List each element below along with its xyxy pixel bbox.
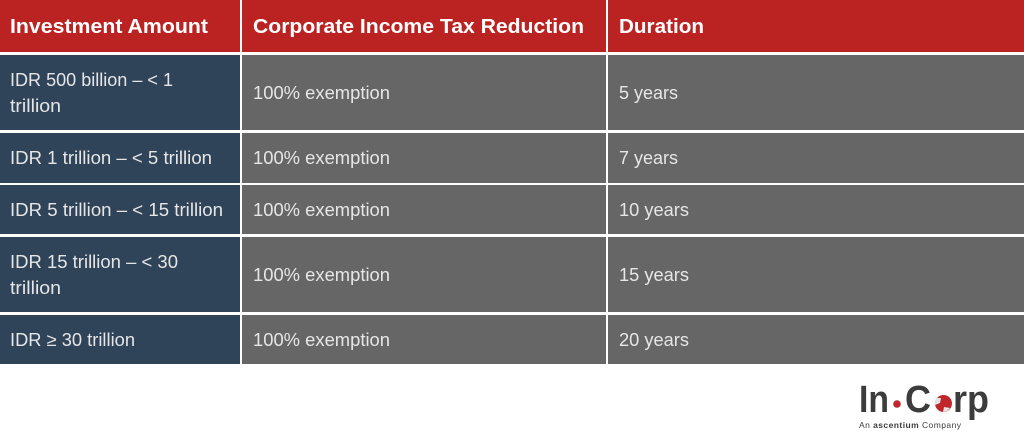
logo tagline: An ascentium Company bbox=[859, 420, 962, 430]
table header row bbox=[0, 0, 1024, 52]
tax reduction cell: 100% exemption bbox=[253, 83, 390, 103]
investment amount cell: trillion bbox=[10, 278, 61, 298]
header: investment amount bbox=[0, 0, 240, 52]
duration cell bbox=[608, 315, 1024, 364]
tax reduction cell bbox=[242, 133, 606, 183]
tax reduction cell: 100% exemption bbox=[253, 200, 390, 220]
header: corporate income tax reduction bbox=[242, 0, 606, 52]
duration cell bbox=[608, 237, 1024, 312]
duration cell: 15 years bbox=[619, 265, 689, 285]
investment amount cell: IDR 500 billion – < 1 bbox=[10, 70, 173, 90]
duration cell: 10 years bbox=[619, 200, 689, 220]
investment amount cell bbox=[0, 133, 240, 183]
row 4 bbox=[0, 237, 1024, 312]
investment amount cell: IDR 1 trillion – < 5 trillion bbox=[10, 148, 212, 168]
row 3 bbox=[0, 185, 1024, 234]
row 2 bbox=[0, 133, 1024, 183]
duration cell: 20 years bbox=[619, 330, 689, 350]
investment amount cell: IDR 15 trillion – < 30 bbox=[10, 252, 178, 272]
investment amount cell: IDR 5 trillion – < 15 trillion bbox=[10, 200, 223, 220]
row 1 bbox=[0, 55, 1024, 130]
investment amount cell: IDR ≥ 30 trillion bbox=[10, 330, 135, 350]
duration cell bbox=[608, 55, 1024, 130]
header: corporate income tax reduction: Corporate Income Tax Reduction bbox=[253, 15, 584, 38]
tax reduction cell: 100% exemption bbox=[253, 265, 390, 285]
logo letter C: C bbox=[905, 379, 931, 421]
header: investment amount: Investment Amount bbox=[10, 15, 208, 38]
tax reduction cell: 100% exemption bbox=[253, 330, 390, 350]
header: duration: Duration bbox=[619, 15, 704, 38]
tax reduction cell: 100% exemption bbox=[253, 148, 390, 168]
tax reduction cell bbox=[242, 55, 606, 130]
logo wordmark In: In bbox=[859, 379, 889, 421]
investment amount cell bbox=[0, 237, 240, 312]
icon: red globe bbox=[935, 395, 952, 412]
duration cell: 5 years bbox=[619, 83, 678, 103]
duration cell bbox=[608, 133, 1024, 183]
tax reduction cell bbox=[242, 315, 606, 364]
investment amount cell bbox=[0, 315, 240, 364]
investment amount cell: trillion bbox=[10, 96, 61, 116]
logo letters rp: rp bbox=[953, 379, 989, 421]
investment amount cell bbox=[0, 185, 240, 234]
duration cell bbox=[608, 185, 1024, 234]
logo: InCorp bbox=[859, 379, 989, 430]
tax reduction cell bbox=[242, 185, 606, 234]
tax reduction cell bbox=[242, 237, 606, 312]
logo red dot bbox=[893, 400, 901, 408]
investment amount cell bbox=[0, 55, 240, 130]
duration cell: 7 years bbox=[619, 148, 678, 168]
header: duration bbox=[608, 0, 1024, 52]
row 5 bbox=[0, 315, 1024, 364]
